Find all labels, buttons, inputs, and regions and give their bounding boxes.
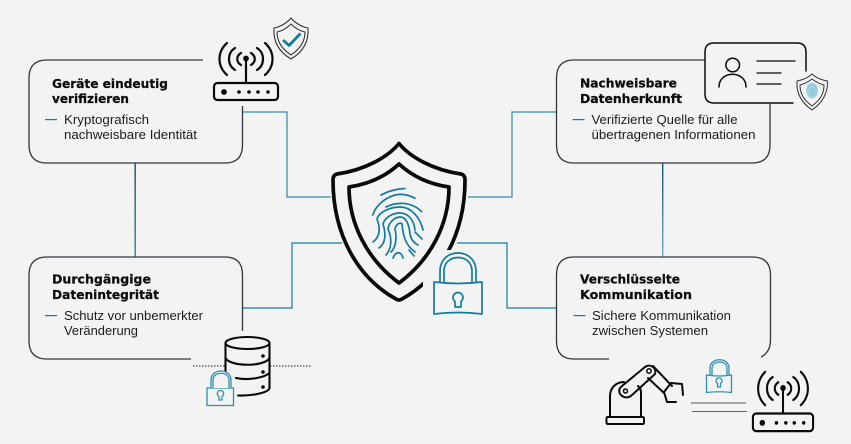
- database: [226, 337, 270, 396]
- panel: Nachweisbare Datenherkunft: [556, 60, 770, 163]
- data transfer lines: [691, 403, 747, 412]
- dash marker: [45, 119, 57, 120]
- heading: Verschlüsselte Kommunikation: Kommunikation: [580, 288, 692, 303]
- heading: Durchgängige Datenintegrität: Datenintegrität: [52, 288, 159, 303]
- heading: Geräte eindeutig verifizieren: verifizieren: [52, 92, 129, 107]
- connectors between panels and central shield: [134, 112, 663, 308]
- person: [719, 58, 746, 87]
- dash marker: [574, 315, 586, 316]
- panel: Durchgängige Datenintegrität: [29, 257, 242, 359]
- padlock: [207, 371, 234, 406]
- heading: Nachweisbare Datenherkunft: Datenherkunft: [580, 92, 682, 107]
- icon: robot arm: [606, 366, 683, 424]
- text: Schutz vor unbemerkter Veränderung: Veränderung: [64, 323, 138, 338]
- ID card: [705, 43, 806, 103]
- text lines: [757, 61, 795, 84]
- dash marker: [572, 119, 584, 120]
- panel: Verschlüsselte Kommunikation: [556, 257, 770, 359]
- shield inner outline: [349, 164, 449, 283]
- fingerprint: [373, 188, 423, 258]
- small fingerprint shield: [797, 74, 828, 110]
- dotted line: [193, 365, 312, 367]
- heading: Durchgängige Datenintegrität: Durchgängige: [52, 272, 151, 288]
- heading: Verschlüsselte Kommunikation: Verschlüsselte: [580, 272, 680, 288]
- shield check: [274, 18, 308, 59]
- text: Verifizierte Quelle für alle übertragenen Informationen: Verifizierte Quelle für alle: [592, 112, 738, 127]
- text: Sichere Kommunikation zwischen Systemen: Sichere Kommunikation: [592, 308, 731, 323]
- router: [214, 43, 278, 100]
- heading: Geräte eindeutig verifizieren: Geräte eindeutig: [52, 77, 168, 92]
- text: Kryptografisch nachweisbare Identität: nachweisbare Identität: [64, 127, 197, 142]
- shield outer outline: [333, 144, 465, 300]
- text: Schutz vor unbemerkter Veränderung: Schutz vor unbemerkter: [64, 308, 204, 323]
- padlock: [434, 253, 482, 314]
- icon: ID card with fingerprint shield: [705, 43, 828, 110]
- icon: central shield with fingerprint and padlock: [333, 144, 493, 322]
- text: Verifizierte Quelle für alle übertragenen Informationen: übertragenen Informationen: [592, 127, 756, 142]
- text: Kryptografisch nachweisbare Identität: Kryptografisch: [64, 112, 149, 127]
- icon: router bottom right: [753, 372, 813, 431]
- dash marker: [45, 315, 57, 316]
- panel: Geräte eindeutig verifizieren: [29, 60, 242, 163]
- icon: database with padlock: [193, 337, 312, 406]
- text: Sichere Kommunikation zwischen Systemen: zwischen Systemen: [592, 323, 708, 338]
- heading: Nachweisbare Datenherkunft: Nachweisbare: [580, 76, 677, 92]
- icon: small padlock above lines: [706, 360, 732, 392]
- icon: router with shield check: [214, 18, 308, 100]
